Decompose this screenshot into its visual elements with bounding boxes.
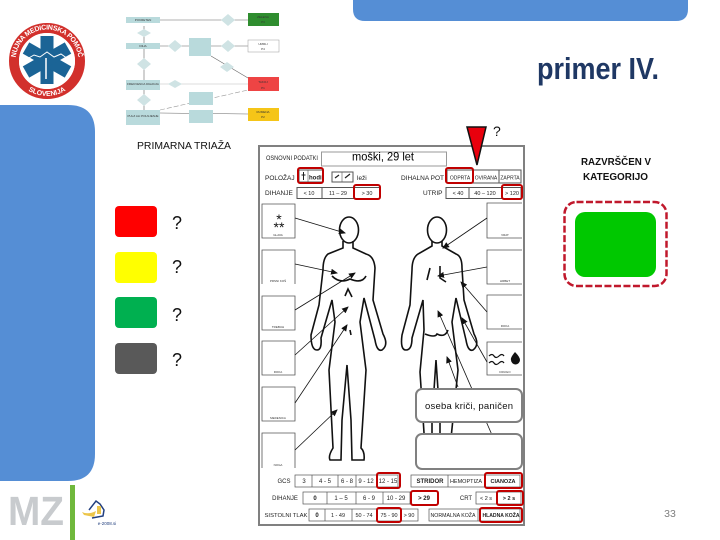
triage flowchart: RUMENA [256, 110, 270, 114]
form: left box captions: NOGA [274, 463, 282, 467]
heading: primer IV. [537, 51, 659, 86]
form: scoring rows: SISTOLNI TLAK [264, 513, 308, 519]
form: basic data: 11 – 29 [329, 191, 347, 197]
form: basic data: hodi [309, 176, 322, 182]
logo: emergency medical service: NUJNA MEDICINSKA POMOČ [11, 24, 84, 58]
form: scoring rows: DIHANJE [272, 496, 298, 502]
form: basic data: > 120 [505, 191, 519, 197]
form: scoring rows: 1 - 49 [331, 513, 345, 519]
form: scoring rows: 3 [302, 479, 306, 485]
callout: patient shouting [416, 389, 522, 422]
form: right box captions: HRBET [500, 279, 510, 283]
triage flowchart [126, 13, 279, 125]
form: basic data: DIHALNA POT [401, 175, 444, 182]
form: scoring rows: 4 - 5 [319, 479, 332, 485]
triage flowchart: PULZ ALI POLNJENJE [127, 114, 159, 118]
form: scoring rows: 75 - 90 [380, 513, 398, 519]
form: right injury boxes [487, 203, 522, 375]
form: scoring rows: 9 - 12 [358, 479, 374, 485]
page number: 33 [664, 508, 676, 520]
form: scoring rows: GCS [277, 479, 291, 485]
triage flowchart: P3 [261, 20, 265, 24]
red triangle marker [467, 127, 486, 165]
icon: burn marks [274, 211, 285, 235]
form: scoring rows: CIANOZA [490, 479, 516, 485]
form: left box captions: ROKA [274, 370, 282, 374]
form: scoring rows: CRT [460, 496, 472, 502]
triage category: grey: ? [172, 350, 182, 370]
sorted into category label: RAZVRŠČEN V [581, 155, 651, 168]
form: scoring rows: 1 – 5 [334, 496, 348, 502]
form: scoring rows: 10 - 29 [387, 496, 406, 502]
triage category: yellow [115, 252, 182, 283]
injury pointer arrows [295, 218, 492, 450]
form: right box captions: VRAT [501, 233, 509, 237]
triage form [259, 146, 524, 525]
form: scoring rows [264, 475, 521, 521]
form: scoring rows: < 2 s [480, 496, 492, 502]
triage flowchart: P4 [261, 47, 265, 51]
form: basic data: > 30 [362, 191, 372, 197]
icon: burn marks: ** [274, 219, 285, 235]
form: red selection outlines [298, 168, 523, 522]
form: scoring rows: > 90 [404, 513, 414, 519]
triage flowchart: DIHA [139, 44, 147, 48]
body outline: back [402, 217, 477, 460]
triage category: grey [115, 343, 182, 374]
form: scoring rows: 0 [313, 496, 317, 502]
form: scoring rows: NORMALNA KOŽA [430, 511, 476, 519]
form: scoring rows: > 2 s [503, 496, 515, 502]
form: scoring rows: 0 [315, 513, 319, 519]
triage flowchart: ZELENA [257, 15, 269, 19]
form: basic data: ZAPRTA [500, 176, 520, 182]
form: scoring rows: 50 - 74 [355, 513, 373, 519]
top-right blue banner [353, 0, 688, 21]
triage flowchart: FREKVENCA DIHANJA [127, 82, 159, 86]
form: right box captions: DRUGO [499, 370, 511, 374]
form: basic data: UTRIP [423, 190, 442, 197]
form: basic data: < 40 [453, 191, 463, 197]
form: left box captions: PRSNI KOŠ [270, 278, 286, 283]
form: basic data: 40 – 120 [474, 191, 496, 197]
form: basic data: OVIRANA [475, 176, 498, 182]
form: left box captions: TREBUH [272, 325, 284, 329]
form: left box captions [270, 233, 286, 467]
triage flowchart: P1 [261, 86, 265, 90]
form: basic data [265, 150, 521, 199]
icon: water and blood [489, 352, 520, 364]
triage flowchart: POKRETEN [135, 18, 151, 22]
triage category: red [115, 206, 182, 237]
form: basic data: leži [357, 175, 367, 182]
logo: emergency medical service [9, 23, 85, 99]
left blue panel [0, 105, 95, 481]
form: scoring rows: HEMOPTIZA [450, 479, 482, 485]
form: scoring rows: 12 - 15 [379, 479, 398, 485]
form: right box captions: ROKA [501, 324, 509, 328]
form: basic data: < 10 [304, 191, 314, 197]
form: basic data: OSNOVNI PODATKI [266, 155, 318, 162]
form: scoring rows: HLADNA KOŽA [482, 511, 520, 519]
form: left injury boxes [262, 204, 295, 468]
form: basic data: DIHANJE [265, 190, 293, 197]
question mark by marker: ? [493, 123, 501, 139]
small e-health logo: e-2008.si [98, 521, 116, 526]
triage flowchart: UMRLI [258, 42, 268, 46]
body outline: front [311, 217, 386, 460]
form: basic data: ODPRTA [450, 176, 471, 182]
triage flowchart: P2 [261, 115, 265, 119]
triage category: red: ? [172, 213, 182, 233]
icon: burn marks: * [276, 211, 282, 227]
form: left box captions: MEDENICA [270, 416, 286, 420]
triage flowchart: TAKOJ [258, 80, 268, 84]
form: right box captions [499, 233, 511, 374]
triage category: yellow: ? [172, 257, 182, 277]
triage category: green: ? [172, 305, 182, 325]
primary triage label: PRIMARNA TRIAŽA [137, 139, 231, 152]
triage category: green [115, 297, 182, 328]
assigned category: green with dashed border [564, 202, 666, 286]
form: scoring rows: STRIDOR [416, 479, 444, 485]
MZ logo: MZ [8, 488, 64, 534]
empty callout [416, 434, 522, 469]
logo: emergency medical service: SLOVENIJA [28, 87, 66, 96]
category label second line: KATEGORIJO [583, 172, 648, 183]
form: basic data: POLOŽAJ [265, 173, 295, 182]
form: left box captions: GLAVA [273, 233, 283, 237]
callout: patient shouting: oseba kriči, paničen [425, 401, 513, 412]
form: scoring rows: 6 - 8 [341, 479, 354, 485]
form: basic data: moški, 29 let [352, 150, 415, 164]
form: scoring rows: 6 - 9 [363, 496, 376, 502]
small e-health logo [82, 501, 116, 526]
form: scoring rows: > 29 [418, 496, 431, 502]
